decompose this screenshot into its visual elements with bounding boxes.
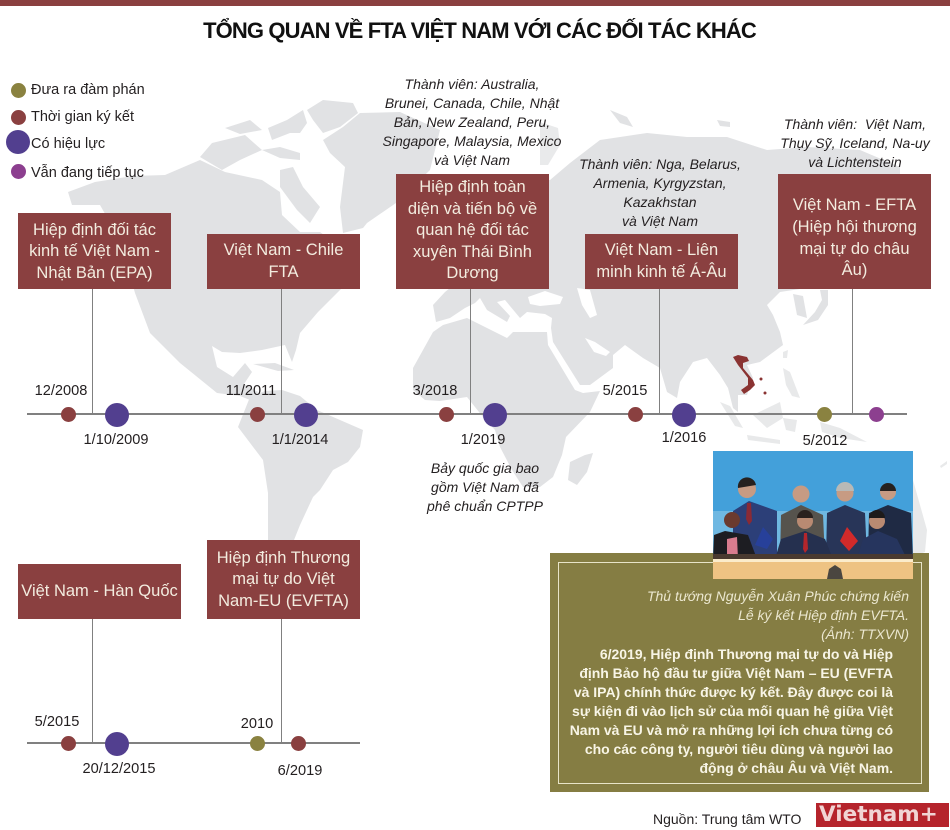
note: CPTPP members: Singapore, Malaysia, Mexico (382, 133, 561, 149)
note: EFTA members: Thành viên: Việt Nam, (784, 116, 926, 132)
box: Vietnam - Eurasian Economic Union: minh kinh tế Á-Âu (596, 263, 727, 281)
note: CPTPP members: Bản, New Zealand, Peru, (394, 114, 550, 130)
body text: sự kiện đi vào lịch sử của mối quan hệ giữa Việt (572, 703, 893, 719)
box: Vietnam - Eurasian Economic Union (585, 234, 738, 289)
timeline: upper: 1/2019 (461, 432, 505, 448)
box: Vietnam - EFTA: (Hiệp hội thương (792, 218, 917, 236)
body text (570, 646, 894, 776)
note: CPTPP ratification: phê chuẩn CPTPP (427, 498, 543, 514)
source: Nguồn: Trung tâm WTO (653, 811, 801, 827)
note: CPTPP ratification: Bảy quốc gia bao (431, 460, 539, 476)
note: CPTPP ratification: gồm Việt Nam đã (431, 479, 539, 495)
body text: Nam và EU và mở ra những lợi ích chưa từng có (570, 722, 893, 738)
timeline: upper: 5/2012 (803, 433, 847, 449)
box: Vietnam - Korea (18, 564, 181, 619)
box: CPTPP: Dương (446, 264, 499, 282)
box: Vietnam - EFTA: mại tự do châu (799, 240, 910, 258)
box: CPTPP: xuyên Thái Bình (413, 243, 532, 261)
body text: động ở châu Âu và Việt Nam. (699, 760, 893, 776)
note: EAEU members: Thành viên: Nga, Belarus, (579, 156, 741, 172)
timeline: upper: 1/10/2009 (84, 432, 148, 448)
box: Vietnam - Japan EPA: Nhật Bản (EPA) (36, 264, 153, 282)
box: Vietnam - EFTA (778, 174, 931, 289)
photo caption: Thủ tướng Nguyễn Xuân Phúc chứng kiến (647, 588, 909, 604)
box: Vietnam - Chile FTA: Việt Nam - Chile (224, 241, 343, 259)
note: EFTA members (780, 116, 930, 170)
body text: và IPA) chính thức được ký kết. Đây được coi là (574, 684, 893, 700)
southeast asia islands (720, 350, 947, 560)
box: EVFTA (207, 540, 360, 619)
note: CPTPP members: Thành viên: Australia, (405, 76, 539, 92)
legend: Thời gian ký kết (31, 109, 134, 125)
timeline: lower: 20/12/2015 (82, 761, 156, 777)
note: EAEU members: Kazakhstan (623, 194, 697, 210)
box: Vietnam - EFTA: Âu) (842, 261, 867, 279)
title: TỔNG QUAN VỀ FTA VIỆT NAM VỚI CÁC ĐỐI TÁC KHÁC (203, 18, 756, 43)
box: Vietnam - Chile FTA: FTA (269, 263, 298, 281)
note: EAEU members: và Việt Nam (622, 213, 698, 229)
box: Vietnam - Korea: Việt Nam - Hàn Quốc (21, 582, 178, 600)
legend (6, 82, 145, 181)
note: CPTPP members: Brunei, Canada, Chile, Nhật (385, 95, 559, 111)
box: CPTPP: diện và tiến bộ về (408, 200, 537, 218)
note: CPTPP members: và Việt Nam (434, 152, 510, 168)
box: EVFTA: Nam-EU (EVFTA) (218, 592, 349, 610)
box: Vietnam - Japan EPA: kinh tế Việt Nam - (29, 242, 160, 260)
box: CPTPP: quan hệ đối tác (416, 221, 529, 239)
box: CPTPP: Hiệp định toàn (419, 178, 526, 196)
box: EVFTA: mại tự do Việt (232, 570, 335, 588)
timeline: upper (27, 289, 907, 449)
photo caption (647, 588, 909, 642)
note: CPTPP members (382, 76, 561, 168)
timeline: upper: 1/2016 (662, 430, 706, 446)
timeline: upper: 3/2018 (413, 383, 457, 399)
note: EAEU members: Armenia, Kyrgyzstan, (593, 175, 727, 191)
timeline: upper: 12/2008 (35, 383, 87, 399)
legend: Vẫn đang tiếp tục (31, 165, 144, 181)
box: CPTPP (396, 174, 549, 289)
note: EFTA members: và Lichtenstein (808, 154, 902, 170)
legend: Đưa ra đàm phán (31, 82, 145, 98)
box: Vietnam - EFTA: Việt Nam - EFTA (793, 196, 916, 214)
timeline: lower: 2010 (241, 716, 273, 732)
body text: cho các công ty, người tiêu dùng và người lao (585, 741, 893, 757)
timeline: lower: 5/2015 (35, 714, 79, 730)
body text: 6/2019, Hiệp định Thương mại tự do và Hiệp (600, 646, 893, 662)
panel: EVFTA signing (550, 553, 929, 792)
timeline: upper: 1/1/2014 (272, 432, 328, 448)
body text: định Bảo hộ đầu tư giữa Việt Nam – EU (EVFTA (579, 665, 893, 681)
top bar (0, 0, 950, 6)
icon: Vietnam map (733, 355, 766, 394)
timeline: upper: 11/2011 (226, 383, 276, 399)
photo: signing ceremony (713, 451, 913, 579)
box: Vietnam - Japan EPA (18, 213, 171, 289)
box: Vietnam - Japan EPA: Hiệp định đối tác (33, 221, 156, 239)
legend: Có hiệu lực (31, 136, 105, 152)
timeline: upper: 5/2015 (603, 383, 647, 399)
note: EFTA members: Thụy Sỹ, Iceland, Na-uy (780, 135, 930, 151)
box: Vietnam - Chile FTA (207, 234, 360, 289)
note: CPTPP ratification (426, 460, 543, 514)
seas (528, 288, 610, 356)
note: EAEU members (579, 156, 741, 229)
timeline: lower: 6/2019 (278, 763, 322, 779)
photo caption: (Ảnh: TTXVN) (821, 626, 909, 642)
box: EVFTA: Hiệp định Thương (217, 549, 350, 567)
timeline: lower (27, 619, 360, 779)
box: Vietnam - Eurasian Economic Union: Việt Nam - Liên (605, 241, 718, 259)
photo caption: Lễ ký kết Hiệp định EVFTA. (738, 607, 909, 623)
